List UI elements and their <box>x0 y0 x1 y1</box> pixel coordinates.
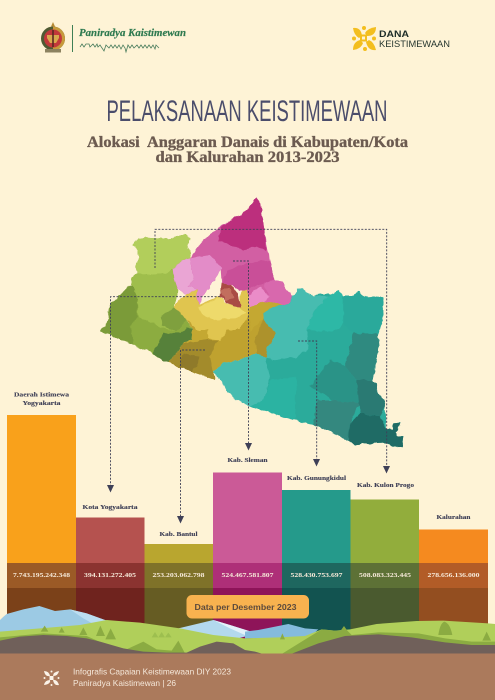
connector: Kab. Gunungkidul <box>298 341 320 466</box>
bar: Kota Yogyakarta: 394.131.272.405 <box>84 572 137 579</box>
footer text <box>73 668 231 688</box>
subtitle: dan Kalurahan 2013-2023 <box>156 149 340 166</box>
bar: Kab. Kulon Progo: 508.083.323.445 <box>359 572 412 579</box>
badge: data date <box>186 595 309 618</box>
bar: Daerah Istimewa Yogyakarta: Daerah Istimewa <box>14 392 70 398</box>
bar chart <box>7 392 488 650</box>
bar: Daerah Istimewa Yogyakarta: 7.743.195.242.348 <box>13 572 71 579</box>
bar: Kab. Gunungkidul <box>282 475 350 650</box>
subtitle <box>87 134 408 166</box>
footer text: Infografis Capaian Keistimewaan DIY 2023 <box>73 668 231 676</box>
bar: Daerah Istimewa Yogyakarta: Yogyakarta <box>22 400 62 407</box>
darker hill ridges <box>0 626 495 655</box>
pine trees <box>41 622 491 641</box>
region: Kab. Gunungkidul <box>213 288 403 448</box>
connector: Kota Yogyakarta <box>107 297 220 492</box>
connector: Kab. Bantul <box>177 350 205 524</box>
brown ground <box>0 634 495 655</box>
connector: Kab. Kulon Progo <box>155 229 390 474</box>
bar: Kab. Sleman <box>213 457 282 650</box>
mountains <box>0 606 318 643</box>
region: Kota Yogyakarta <box>220 283 241 308</box>
bar: Kalurahan <box>419 514 488 650</box>
bar: Kota Yogyakarta: Kota Yogyakarta <box>82 504 139 511</box>
footer text: Paniradya Kaistimewan | 26 <box>73 679 176 688</box>
bar: Kab. Sleman: Kab. Sleman <box>228 457 268 464</box>
footer band <box>0 654 495 700</box>
region: Kab. Sleman <box>173 197 293 307</box>
subtitle: Alokasi Anggaran Danais di Kabupaten/Kota <box>87 134 408 151</box>
region: Kab. Bantul <box>168 289 282 380</box>
region: Kab. Kulon Progo <box>100 234 192 363</box>
logo: Dana Keistimewaan: DANA <box>379 29 410 39</box>
logo: Paniradya Kaistimewan: Paniradya Kaistimewan <box>79 28 186 39</box>
bar: Kab. Bantul: 253.203.062.798 <box>152 572 205 579</box>
badge: data date: Data per Desember 2023 <box>194 602 297 612</box>
bar: Kab. Bantul <box>144 531 213 650</box>
logo: Dana Keistimewaan <box>352 26 450 51</box>
bar: Kab. Gunungkidul: Kab. Gunungkidul <box>287 475 346 482</box>
logo: Paniradya Kaistimewan <box>41 22 186 52</box>
connector: Kab. Sleman <box>233 261 252 450</box>
map of DIY <box>100 197 403 448</box>
bar: Daerah Istimewa Yogyakarta <box>7 392 76 650</box>
bar: Kab. Sleman: 524.467.581.807 <box>222 572 274 579</box>
landscape <box>0 606 495 655</box>
bar: Kab. Kulon Progo <box>350 482 419 650</box>
bar: Kab. Bantul: Kab. Bantul <box>160 531 198 538</box>
bar: Kab. Gunungkidul: 528.430.753.697 <box>290 572 343 579</box>
bar: Kota Yogyakarta <box>76 504 144 650</box>
footer icon <box>44 670 60 686</box>
bar: Kalurahan: 278.656.136.000 <box>428 572 480 579</box>
bar: Kab. Kulon Progo: Kab. Kulon Progo <box>357 482 414 489</box>
bar: Kalurahan: Kalurahan <box>436 514 471 521</box>
logo: Dana Keistimewaan: KEISTIMEWAAN <box>379 39 450 49</box>
green hills <box>0 620 495 655</box>
